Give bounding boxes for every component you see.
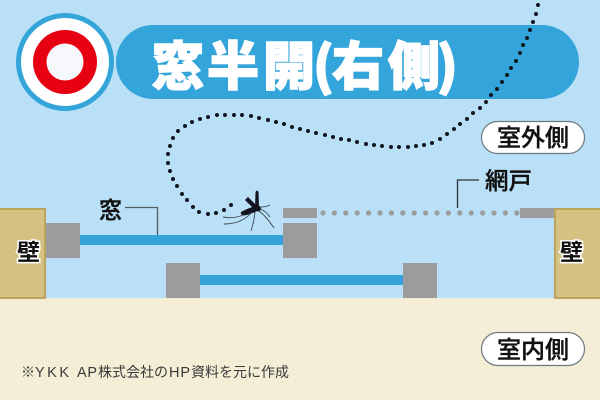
right wall — [555, 209, 600, 298]
mosquito flight path — [166, 3, 540, 216]
label: window — [99, 191, 158, 235]
leader line: window — [125, 208, 158, 235]
source note: 株式会社の — [98, 364, 168, 380]
title: 窓半開(右側) — [152, 25, 458, 100]
source note: HP — [169, 365, 190, 381]
wall label: 壁 — [17, 233, 40, 267]
label: screen — [458, 162, 532, 208]
source note: ※ — [21, 364, 35, 380]
label: indoor side — [482, 330, 584, 366]
source note: 資料を元に作成 — [191, 364, 289, 380]
left wall — [0, 209, 45, 298]
source note: AP — [77, 365, 97, 381]
inner window sash — [166, 263, 437, 298]
label: outdoor side — [482, 118, 584, 154]
source note: YKK — [35, 365, 69, 381]
icon: mosquito — [223, 190, 274, 231]
leader line: screen — [458, 180, 479, 208]
outer window sash — [46, 223, 317, 258]
label: screen: 網戸 — [485, 162, 532, 196]
title banner — [116, 25, 579, 100]
panel: indoor floor area — [0, 298, 600, 400]
label: indoor side: 室内側 — [497, 330, 569, 365]
label: outdoor side: 室外側 — [497, 118, 569, 153]
label: window: 窓 — [99, 191, 122, 225]
icon: double circle rating mark — [16, 13, 114, 111]
window screen — [283, 208, 554, 218]
wall label: 壁 — [560, 233, 583, 267]
